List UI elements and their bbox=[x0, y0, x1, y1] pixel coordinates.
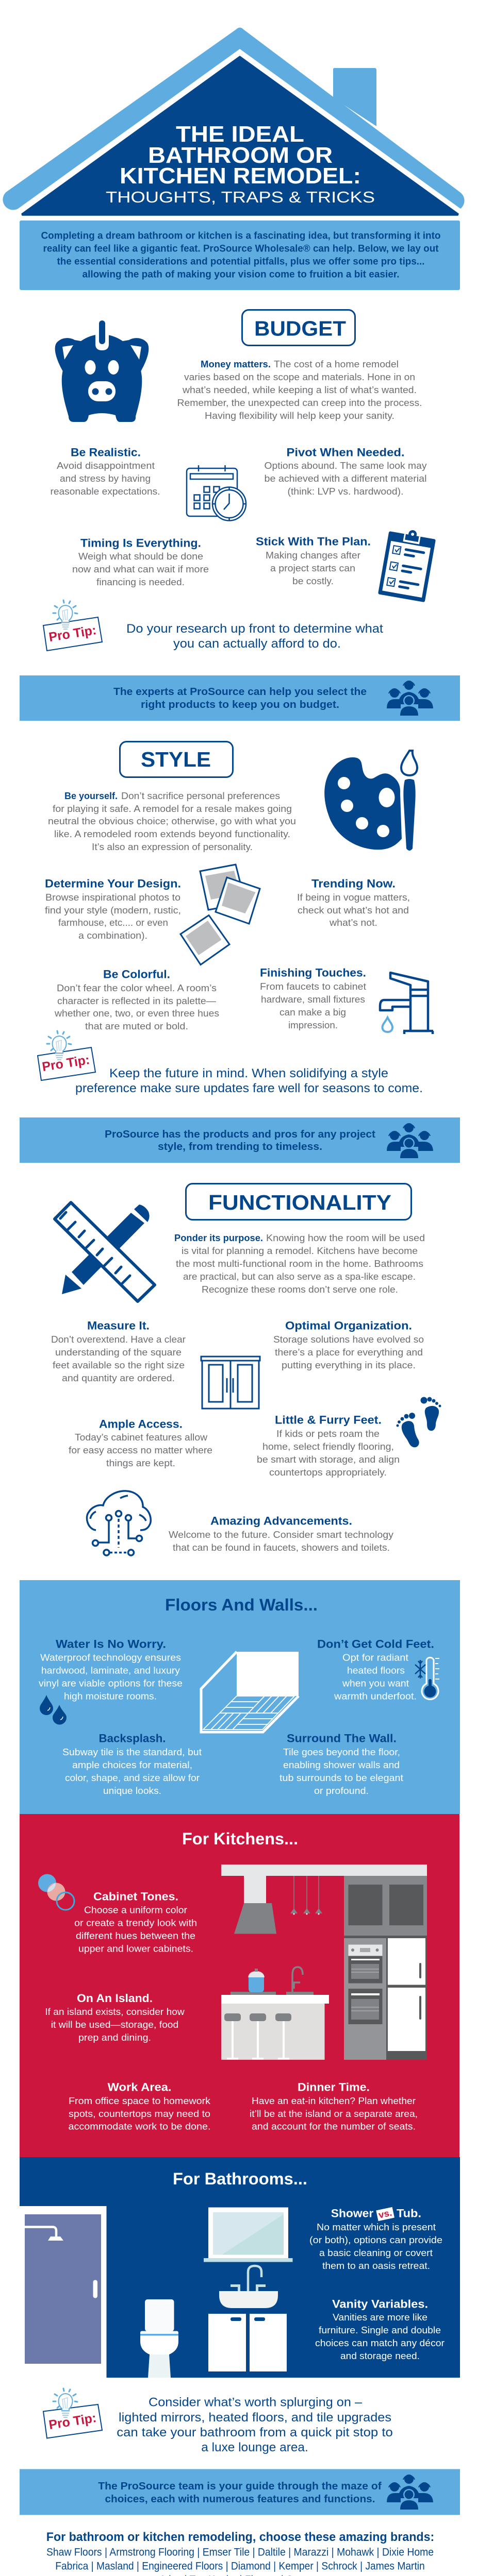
text block: amazing advancements: Amazing Advancements. bbox=[210, 1515, 352, 1527]
text block: be realistic: and stress by having bbox=[60, 473, 151, 484]
text block: cabinet tones: Cabinet Tones. bbox=[93, 1890, 178, 1903]
text block: shower vs tub bbox=[309, 2207, 442, 2271]
text block: money matters: varies based on the scope and materials. Hone in on bbox=[184, 372, 415, 382]
text block: ponder its purpose: Recognize these rooms don’t serve one role. bbox=[202, 1284, 398, 1295]
text block: water is no worry bbox=[39, 1637, 183, 1701]
text block: trending now: If being in vogue matters, bbox=[297, 892, 410, 903]
text block: be yourself: It’s also an expression of personality. bbox=[92, 842, 253, 852]
callout: pro tip text bathrooms: a luxe lounge area. bbox=[201, 2441, 308, 2454]
text block: surround the wall: or profound. bbox=[314, 1786, 369, 1796]
icon: footprints bbox=[396, 1397, 441, 1447]
panel: prosource team banner: choices, each with numerous features and functions. bbox=[105, 2494, 375, 2505]
text block: surround the wall: enabling shower walls and bbox=[283, 1760, 400, 1770]
text block: surround the wall bbox=[279, 1732, 403, 1796]
text block: be realistic: reasonable expectations. bbox=[51, 486, 160, 497]
text block: pivot when needed: Options abound. The same look may bbox=[264, 461, 427, 471]
text block: work area: From office space to homework bbox=[69, 2096, 211, 2106]
callout: pro tip text budget bbox=[126, 622, 383, 651]
text block: dinner time: and account for the number of seats. bbox=[252, 2122, 416, 2132]
icon: piggy bank bbox=[55, 319, 149, 422]
text block: dinner time: it’ll be at the island or a separate area, bbox=[250, 2109, 418, 2119]
illustration: shower door bbox=[20, 2206, 106, 2378]
icon: photos bbox=[180, 865, 260, 964]
icon: faucet bbox=[380, 973, 433, 1034]
panel: products and pros banner: ProSource has the products and pros for any project bbox=[105, 1129, 375, 1140]
text block: vanity variables: Vanities are more like bbox=[333, 2312, 427, 2323]
heading: functionality: FUNCTIONALITY bbox=[208, 1191, 391, 1214]
text block: water is no worry: vinyl are viable options for these bbox=[39, 1679, 183, 1689]
text block: finishing touches: impression. bbox=[288, 1020, 338, 1030]
text block: finishing touches bbox=[260, 967, 366, 1030]
text block: amazing advancements: Welcome to the future. Consider smart technology bbox=[169, 1530, 393, 1540]
text block: backsplash: Subway tile is the standard, but bbox=[62, 1747, 202, 1757]
icon: clipboard checklist bbox=[378, 526, 437, 602]
text block: determine your design: find your style (modern, rustic, bbox=[45, 905, 181, 916]
text block: backsplash: color, shape, and size allow for bbox=[65, 1773, 200, 1783]
heading: floors and walls: Floors And Walls... bbox=[165, 1596, 318, 1614]
icon: color swatches bbox=[38, 1874, 74, 1910]
text block: stick with the plan bbox=[256, 535, 371, 586]
main title text: BATHROOM OR bbox=[148, 143, 333, 168]
icon: cabinet bbox=[201, 1357, 260, 1409]
text block: little and furry feet bbox=[257, 1414, 400, 1478]
heading: style bbox=[120, 742, 233, 777]
callout: pro tip text bathrooms bbox=[117, 2396, 393, 2454]
text block: optimal organization: there’s a place for everything and bbox=[275, 1347, 423, 1358]
text block: on an island bbox=[45, 1992, 185, 2043]
text block: little and furry feet: countertops appropriately. bbox=[269, 1467, 387, 1478]
text block: cabinet tones: or create a trendy look with bbox=[74, 1918, 197, 1928]
text block: be yourself: Don’t sacrifice personal preferences bbox=[121, 791, 280, 801]
text block: amazing advancements: that can be found in faucets, showers and toilets. bbox=[173, 1543, 390, 1553]
text block: on an island: If an island exists, consider how bbox=[45, 2007, 185, 2017]
panel: for bathrooms bbox=[20, 2157, 460, 2378]
text block: backsplash: Backsplash. bbox=[99, 1732, 166, 1744]
panel: floors and walls bbox=[20, 1580, 460, 1814]
text block: money matters bbox=[177, 359, 422, 421]
text block: determine your design: farmhouse, etc.... or even bbox=[58, 918, 168, 928]
panel: products and pros banner: style, from trending to timeless. bbox=[158, 1141, 322, 1153]
text block: surround the wall: Surround The Wall. bbox=[287, 1732, 397, 1744]
title: house header bbox=[3, 28, 465, 215]
text block: don't get cold feet: warmth underfoot. bbox=[334, 1691, 417, 1701]
callout: pro tip badge budget bbox=[43, 600, 102, 651]
heading: for kitchens: For Kitchens... bbox=[182, 1829, 298, 1848]
text block: ponder its purpose: the most multi-functional room in the home. Bathrooms bbox=[176, 1259, 423, 1269]
text block: shower vs tub: them to an oasis retreat. bbox=[322, 2261, 430, 2271]
panel: introduction: allowing the path of making your vision come to fruition a bit easier. bbox=[83, 269, 399, 280]
text block: optimal organization: putting everything in its place. bbox=[282, 1360, 416, 1370]
illustration: mirror and vanity bbox=[204, 2207, 293, 2371]
text block: be realistic: Avoid disappointment bbox=[57, 461, 155, 471]
text block: stick with the plan: Stick With The Plan. bbox=[256, 535, 371, 548]
text block: pivot when needed: (think: LVP vs. hardwood). bbox=[288, 486, 403, 497]
callout: pro tip badge style: Pro Tip: bbox=[41, 1053, 91, 1074]
callout: pro tip text style: Keep the future in mind. When solidifying a style bbox=[109, 1066, 388, 1080]
text block: determine your design bbox=[45, 877, 181, 941]
heading: for bathrooms: For Bathrooms... bbox=[173, 2170, 307, 2188]
text block: cabinet tones: Choose a uniform color bbox=[84, 1905, 187, 1916]
icon: smart tech cloud bbox=[87, 1491, 151, 1555]
text block: measure it: Measure It. bbox=[87, 1319, 150, 1332]
text block: don't get cold feet: heated floors bbox=[347, 1665, 405, 1675]
text block: ample access bbox=[69, 1418, 212, 1468]
text block: don't get cold feet: Opt for radiant bbox=[342, 1653, 408, 1663]
callout: pro tip badge bathrooms: Pro Tip: bbox=[48, 2411, 97, 2432]
text block: shower vs tub: No matter which is present bbox=[317, 2222, 436, 2232]
text block: backsplash bbox=[62, 1732, 202, 1796]
callout: pro tip badge bathrooms bbox=[43, 2388, 102, 2438]
text block: be yourself: neutral the obvious choice; otherwise, go with what you bbox=[48, 816, 296, 826]
text block: measure it: feet available so the right size bbox=[53, 1360, 185, 1370]
text block: brands bbox=[46, 2530, 434, 2576]
text block: optimal organization: Optimal Organization. bbox=[285, 1319, 412, 1332]
text block: measure it bbox=[51, 1319, 186, 1383]
text block: cabinet tones: different hues between the bbox=[76, 1931, 195, 1941]
text block: be colorful: that are muted or bold. bbox=[85, 1021, 188, 1031]
subtitle: THOUGHTS, TRAPS & TRICKS bbox=[106, 188, 375, 206]
icon: ruler and pencil bbox=[55, 1202, 155, 1301]
callout: pro tip text style bbox=[75, 1066, 423, 1095]
text block: little and furry feet: home, select friendly flooring, bbox=[262, 1442, 394, 1452]
text block: timing is everything bbox=[72, 537, 209, 587]
callout: pro tip text budget: you can actually afford to do. bbox=[173, 637, 341, 651]
text block: money matters: Remember, the unexpected can creep into the process. bbox=[177, 398, 422, 408]
text block: measure it: understanding of the square bbox=[55, 1347, 182, 1358]
text block: vanity variables bbox=[315, 2298, 445, 2361]
text block: be colorful: Be Colorful. bbox=[103, 968, 170, 981]
text block: brands: Shaw Floors | Armstrong Flooring | Emser Tile | Daltile | Marazzi | Mohawk | Dixie Home bbox=[46, 2546, 434, 2558]
text block: vanity variables: furniture. Single and double bbox=[319, 2325, 441, 2335]
text block: determine your design: a combination). bbox=[78, 930, 147, 941]
panel: prosource team banner: The ProSource team is your guide through the maze of bbox=[98, 2481, 382, 2492]
text block: cabinet tones: upper and lower cabinets. bbox=[78, 1943, 193, 1954]
icon: agents bbox=[387, 681, 433, 716]
text block: ponder its purpose bbox=[174, 1233, 425, 1295]
text block: optimal organization: Storage solutions have evolved so bbox=[273, 1334, 424, 1345]
text block: shower vs tub: a basic cleaning or covert bbox=[319, 2248, 433, 2258]
text block: be colorful: whether one, two, or even three hues bbox=[54, 1008, 219, 1019]
text block: trending now: check out what’s hot and bbox=[298, 905, 409, 916]
text block: backsplash: unique looks. bbox=[103, 1786, 161, 1796]
text block: be realistic: Be Realistic. bbox=[71, 446, 141, 459]
text block: ponder its purpose: are practical, but can also serve as a spa-like escape. bbox=[183, 1272, 416, 1282]
roof and chimney bbox=[3, 28, 465, 210]
callout: pro tip text budget: Do your research up front to determine what bbox=[126, 622, 383, 636]
text block: timing is everything: Weigh what should be done bbox=[78, 551, 203, 562]
text block: backsplash: ample choices for material, bbox=[72, 1760, 192, 1770]
text block: ponder its purpose: is vital for planning a remodel. Kitchens have become bbox=[182, 1246, 418, 1256]
panel: introduction: Completing a dream bathroom or kitchen is a fascinating idea, but transforming it into bbox=[41, 231, 440, 241]
text block: work area: spots, countertops may need to bbox=[69, 2109, 210, 2119]
illustration: kitchen bbox=[221, 1865, 427, 2060]
text block: cabinet tones bbox=[74, 1890, 197, 1954]
text block: ample access: Ample Access. bbox=[99, 1418, 183, 1430]
text block: pivot when needed: Pivot When Needed. bbox=[287, 446, 404, 459]
icon: paint palette and brush bbox=[324, 751, 417, 851]
panel: for kitchens bbox=[20, 1814, 459, 2157]
icon: thermometer bbox=[415, 1657, 439, 1699]
text block: water is no worry: hardwood, laminate, and luxury bbox=[41, 1665, 180, 1675]
badge: vs: vs. bbox=[377, 2208, 393, 2220]
text block: ponder its purpose: Ponder its purpose. bbox=[174, 1233, 263, 1243]
text block: on an island: it will be used—storage, food bbox=[51, 2020, 178, 2030]
panel: experts banner: The experts at ProSource can help you select the bbox=[113, 686, 367, 698]
panel: introduction: reality can feel like a gigantic feat. ProSource Wholesale® can help. Below, we lay out bbox=[43, 243, 439, 255]
text block: work area bbox=[68, 2080, 211, 2132]
text block: surround the wall: Tile goes beyond the floor, bbox=[283, 1747, 400, 1757]
text block: money matters: Having flexibility will help keep your sanity. bbox=[205, 411, 394, 421]
text block: money matters: Money matters. bbox=[201, 359, 271, 369]
main title text bbox=[120, 122, 361, 189]
text block: stick with the plan: a project starts can bbox=[270, 563, 355, 573]
text block: determine your design: Determine Your Design. bbox=[45, 877, 181, 890]
text block: water is no worry: Water Is No Worry. bbox=[56, 1637, 166, 1651]
text block: finishing touches: From faucets to cabinet bbox=[260, 981, 366, 992]
text block: dinner time bbox=[250, 2080, 418, 2132]
text block: trending now: what’s not. bbox=[329, 918, 377, 928]
text block: finishing touches: hardware, small fixtures bbox=[261, 994, 365, 1005]
text block: be colorful bbox=[54, 968, 219, 1031]
text block: shower vs tub: Tub. bbox=[397, 2207, 421, 2219]
text block: measure it: and quantity are ordered. bbox=[62, 1373, 175, 1383]
panel: introduction bbox=[20, 221, 460, 290]
text block: shower vs tub: Shower bbox=[331, 2207, 374, 2219]
main title text: THE IDEAL bbox=[176, 122, 304, 147]
text block: be yourself: like. A remodeled room extends beyond functionality. bbox=[54, 829, 290, 839]
main title text: KITCHEN REMODEL: bbox=[120, 163, 361, 189]
text block: surround the wall: tub surrounds to be elegant bbox=[279, 1773, 403, 1783]
text block: money matters: what’s needed, while keeping a list of what’s wanted. bbox=[182, 385, 417, 395]
text block: be yourself: for playing it safe. A remodel for a resale makes going bbox=[53, 804, 292, 814]
callout: pro tip badge style bbox=[38, 1031, 95, 1080]
text block: on an island: prep and dining. bbox=[78, 2032, 151, 2043]
text block: pivot when needed bbox=[264, 446, 427, 497]
heading: functionality bbox=[186, 1184, 412, 1220]
text block: vanity variables: choices can match any décor bbox=[315, 2338, 445, 2348]
callout: pro tip text bathrooms: can take your bathroom from a quick pit stop to bbox=[117, 2426, 393, 2439]
text block: stick with the plan: Making changes after bbox=[266, 550, 360, 561]
icon: agents bbox=[387, 2475, 433, 2510]
text block: vanity variables: and storage need. bbox=[340, 2351, 420, 2361]
text block: amazing advancements bbox=[169, 1515, 393, 1553]
text block: brands: For bathroom or kitchen remodeling, choose these amazing brands: bbox=[46, 2530, 434, 2544]
text block: water is no worry: high moisture rooms. bbox=[64, 1691, 157, 1701]
text block: money matters: The cost of a home remodel bbox=[274, 359, 399, 369]
text block: work area: accommodate work to be done. bbox=[68, 2122, 210, 2132]
text block: measure it: Don’t overextend. Have a clear bbox=[51, 1334, 186, 1345]
text block: little and furry feet: If kids or pets roam the bbox=[276, 1429, 380, 1439]
panel: experts banner: right products to keep you on budget. bbox=[141, 699, 339, 710]
text block: timing is everything: financing is needed. bbox=[96, 577, 185, 587]
text block: ample access: for easy access no matter where bbox=[69, 1445, 212, 1455]
panel: prosource team banner bbox=[20, 2469, 460, 2515]
panel: introduction: the essential considerations and potential pitfalls, plus we offer some pro tips... bbox=[57, 257, 425, 267]
text block: don't get cold feet bbox=[317, 1637, 434, 1701]
text block: trending now bbox=[297, 877, 410, 928]
text block: vanity variables: Vanity Variables. bbox=[332, 2298, 428, 2310]
text block: dinner time: Dinner Time. bbox=[298, 2080, 370, 2094]
heading: style: STYLE bbox=[141, 748, 211, 771]
text block: ample access: things are kept. bbox=[106, 1458, 175, 1468]
text block: be realistic bbox=[51, 446, 160, 497]
icon: room floor and wall bbox=[201, 1652, 299, 1732]
heading: budget bbox=[242, 310, 355, 345]
text block: ponder its purpose: Knowing how the room will be used bbox=[266, 1233, 425, 1243]
icon: agents bbox=[387, 1123, 433, 1158]
house gable panel bbox=[22, 56, 458, 215]
text block: optimal organization bbox=[273, 1319, 424, 1370]
callout: pro tip badge budget: Pro Tip: bbox=[48, 623, 97, 645]
text block: shower vs tub: (or both), options can provide bbox=[309, 2235, 442, 2245]
text block: determine your design: Browse inspirational photos to bbox=[45, 892, 180, 903]
text block: timing is everything: Timing Is Everything. bbox=[80, 537, 201, 549]
text block: water is no worry: Waterproof technology ensures bbox=[40, 1653, 181, 1663]
text block: pivot when needed: be achieved with a different material bbox=[264, 473, 427, 484]
text block: little and furry feet: be smart with storage, and align bbox=[257, 1454, 400, 1465]
text block: trending now: Trending Now. bbox=[311, 877, 396, 890]
text block: be yourself: Be yourself. bbox=[64, 791, 118, 801]
illustration: toilet bbox=[140, 2299, 178, 2378]
text block: on an island: On An Island. bbox=[77, 1992, 153, 2005]
callout: pro tip text bathrooms: Consider what’s worth splurging on – bbox=[149, 2396, 363, 2409]
text block: finishing touches: Finishing Touches. bbox=[260, 967, 366, 979]
icon: calendar and clock bbox=[187, 465, 246, 520]
text block: dinner time: Have an eat-in kitchen? Plan whether bbox=[252, 2096, 416, 2106]
text block: finishing touches: can make a big bbox=[279, 1007, 346, 1018]
panel: products and pros banner bbox=[20, 1117, 460, 1163]
text block: be yourself bbox=[48, 791, 296, 852]
text block: ample access: Today’s cabinet features allow bbox=[75, 1432, 208, 1443]
text block: little and furry feet: Little & Furry Feet. bbox=[275, 1414, 382, 1426]
text block: work area: Work Area. bbox=[107, 2080, 171, 2094]
callout: pro tip text bathrooms: lighted mirrors, heated floors, and tile upgrades bbox=[119, 2411, 391, 2425]
callout: pro tip text style: preference make sure updates fare well for seasons to come. bbox=[75, 1081, 423, 1095]
text block: don't get cold feet: Don’t Get Cold Feet. bbox=[317, 1637, 434, 1651]
text block: stick with the plan: be costly. bbox=[292, 576, 334, 586]
text block: don't get cold feet: when you want bbox=[342, 1679, 409, 1689]
text block: be colorful: character is reflected in its palette— bbox=[57, 996, 216, 1006]
panel: experts banner bbox=[20, 675, 460, 721]
text block: brands: Fabrica | Masland | Engineered Floors | Diamond | Kemper | Schrock | James Martin bbox=[55, 2561, 425, 2572]
icon: water drops bbox=[40, 1695, 67, 1724]
text block: be colorful: Don’t fear the color wheel. A room’s bbox=[57, 983, 217, 993]
heading: budget: BUDGET bbox=[254, 316, 346, 340]
text block: timing is everything: now and what can wait if more bbox=[72, 564, 209, 574]
